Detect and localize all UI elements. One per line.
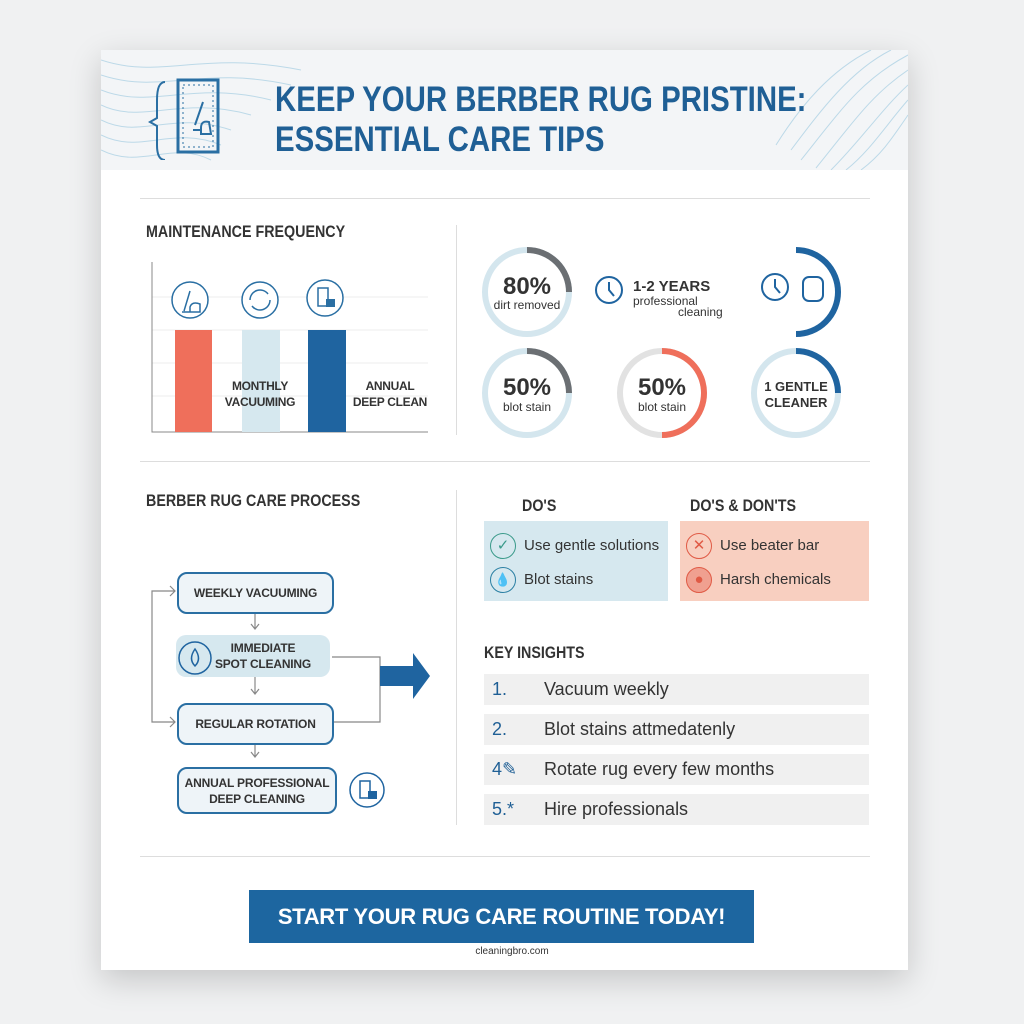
heading: care process: BERBER RUG CARE PROCESS — [146, 491, 360, 510]
stats circles: dirt removed — [494, 298, 560, 312]
stats circles: professional — [633, 294, 698, 308]
stats circles — [482, 247, 841, 438]
bar chart: MONTHLY — [232, 379, 288, 393]
flowchart: WEEKLY VACUUMING — [194, 586, 317, 600]
panel: don'ts: Use beater bar — [720, 537, 819, 554]
stats circles: 1-2 YEARS — [633, 278, 710, 295]
stats circles: 50% — [638, 374, 686, 401]
panel: don'ts: ✕ — [693, 537, 705, 554]
dividers — [140, 198, 870, 199]
panel: don'ts: Harsh chemicals — [720, 571, 831, 588]
insights list: 1. — [492, 679, 507, 699]
insights list: Blot stains attmedatenly — [544, 719, 735, 739]
cta button — [249, 890, 754, 943]
card — [101, 50, 908, 970]
panel: don'ts: ● — [694, 571, 704, 588]
flowchart: DEEP CLEANING — [209, 792, 305, 806]
insights list: Rotate rug every few months — [544, 759, 774, 779]
panel: do's — [484, 521, 668, 601]
panel: do's: Blot stains — [524, 571, 593, 588]
panel: do's: Use gentle solutions — [524, 537, 659, 554]
heading: maintenance frequency: MAINTENANCE FREQUENCY — [146, 222, 345, 241]
stats circles: 1 GENTLE — [764, 379, 828, 394]
panel: do's: ✓ — [497, 537, 509, 554]
title: KEEP YOUR BERBER RUG PRISTINE: — [275, 80, 806, 119]
panel: don'ts — [680, 521, 869, 601]
flowchart: IMMEDIATE — [231, 641, 295, 655]
insights list: Hire professionals — [544, 799, 688, 819]
insights list: 2. — [492, 719, 507, 739]
header band — [101, 50, 908, 170]
title — [275, 80, 806, 159]
bar chart: DEEP CLEAN — [353, 395, 427, 409]
heading: key insights: KEY INSIGHTS — [484, 643, 585, 662]
stats circles: 80% — [503, 273, 551, 300]
dos & donts heading: DO'S & DON'TS — [690, 496, 796, 515]
flowchart: ANNUAL PROFESSIONAL — [185, 776, 329, 790]
arrow — [380, 653, 430, 699]
stats circles: 50% — [503, 374, 551, 401]
title: ESSENTIAL CARE TIPS — [275, 120, 604, 159]
stats circles: CLEANER — [765, 395, 828, 410]
stats circles: blot stain — [503, 400, 551, 414]
bar chart — [152, 262, 428, 432]
bar chart: ANNUAL — [366, 379, 414, 393]
flowchart — [151, 572, 430, 814]
panel: do's: 💧 — [495, 572, 511, 587]
flowchart: REGULAR ROTATION — [195, 717, 316, 731]
stats circles: blot stain — [638, 400, 686, 414]
flowchart: SPOT CLEANING — [215, 657, 311, 671]
bar chart: VACUUMING — [225, 395, 295, 409]
icon: rug with vacuum — [148, 78, 220, 160]
cta button: START YOUR RUG CARE ROUTINE TODAY! — [278, 904, 725, 929]
insights list — [484, 674, 869, 825]
insights list: 4✎ — [492, 759, 517, 779]
insights list: 5.* — [492, 799, 514, 819]
footer url: cleaningbro.com — [475, 946, 549, 957]
stats circles: cleaning — [678, 305, 723, 319]
do's heading: DO'S — [522, 496, 556, 515]
insights list: Vacuum weekly — [544, 679, 669, 699]
